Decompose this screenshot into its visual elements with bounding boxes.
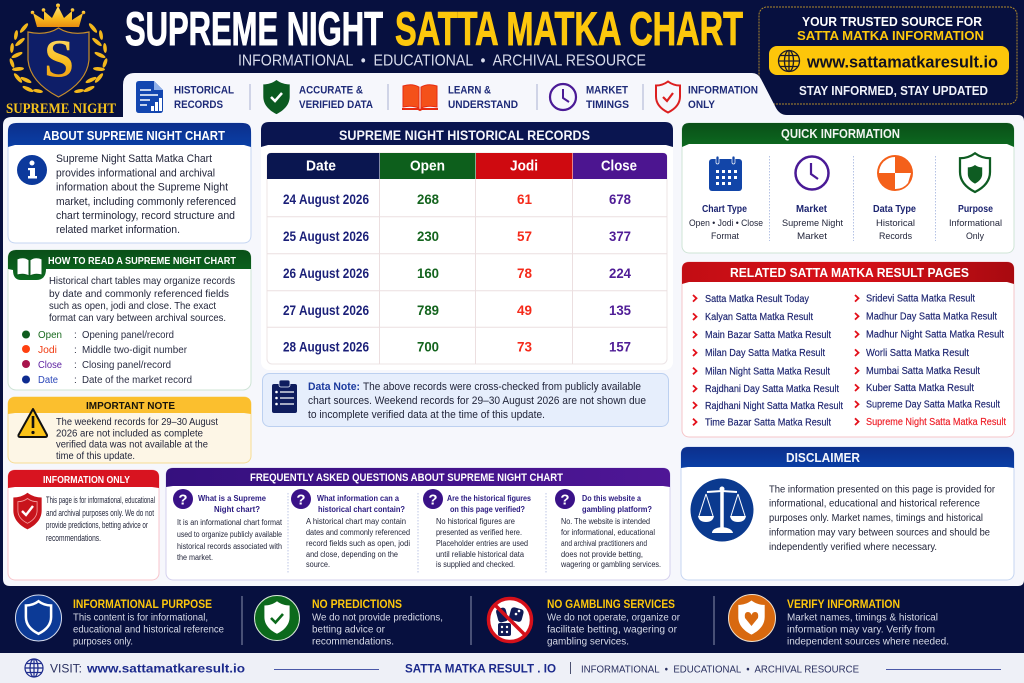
title: SUPREME NIGHT <box>125 3 383 56</box>
legend: jodi: Middle two-digit number <box>82 345 188 356</box>
row: 28 August 2026: 157 <box>609 338 631 354</box>
row: 27 August 2026: 27 August 2026 <box>283 302 369 318</box>
legend: close: Closing panel/record <box>82 360 171 371</box>
highlight: verify information: information may vary. Verify from <box>787 624 935 636</box>
row: 24 August 2026: 678 <box>609 191 631 207</box>
icon: information shield <box>656 82 680 112</box>
icon: footer globe <box>25 659 43 677</box>
links: right column: Mumbai Satta Matka Result <box>866 366 980 377</box>
disclaimer text: independently verified where necessary. <box>769 542 937 553</box>
disclaimer text <box>769 484 996 553</box>
FAQ item 2: source. <box>306 560 330 569</box>
legend: open: Open <box>38 330 62 341</box>
about text: provides informational and archival <box>56 168 215 180</box>
FAQ item 2: A historical chart may contain <box>306 517 406 526</box>
feature strip <box>136 80 758 114</box>
FAQ item 4 <box>555 489 661 569</box>
icon: scales <box>690 478 754 542</box>
table header: open <box>380 153 476 179</box>
table header: open: Open <box>410 158 445 174</box>
FAQ item 4: Do this website a <box>582 493 641 503</box>
about text: information about the Supreme Night <box>56 182 228 194</box>
icon: open book <box>402 85 438 110</box>
disclaimer text: information may vary between sources and should be <box>769 528 990 538</box>
highlight: informational purpose: INFORMATIONAL PURPOSE <box>73 599 212 611</box>
FAQ item 4: No. The website is intended <box>561 517 650 526</box>
FAQ item 1: the market. <box>177 553 213 562</box>
FAQ item 4: does not provide betting, <box>561 550 643 559</box>
accurate data label: ACCURATE & <box>299 84 363 96</box>
FAQ item 1: It is an informational chart format <box>177 518 283 527</box>
visit link: VISIT: <box>50 662 82 676</box>
information only label <box>688 84 758 111</box>
disclaimer text: The information presented on this page is provided for <box>769 484 996 496</box>
data note text: chart sources. Weekend records for 29–30 August 2026 are not shown due <box>308 395 646 407</box>
FAQ item 4: ? <box>560 492 570 508</box>
about heading: ABOUT SUPREME NIGHT CHART <box>43 129 225 143</box>
icon: clock <box>550 84 576 110</box>
row: 26 August 2026: 160 <box>417 265 439 281</box>
links: right column: Sridevi Satta Matka Result <box>866 294 975 304</box>
panel: information only <box>8 470 159 580</box>
legend: date: Date <box>38 375 58 386</box>
row: 25 August 2026: 230 <box>417 228 439 244</box>
FAQ item 3: presented as verified here. <box>436 528 522 537</box>
row: 26 August 2026: 26 August 2026 <box>283 265 369 281</box>
FAQ heading: FREQUENTLY ASKED QUESTIONS ABOUT SUPREME NIGHT CHART <box>250 472 563 484</box>
footer bar <box>0 653 1024 683</box>
panel: disclaimer <box>681 447 1014 580</box>
quick item: market: Market <box>797 231 827 242</box>
about text: chart terminology, record structure and <box>56 210 235 222</box>
FAQ item 3: Are the historical figures <box>447 493 531 503</box>
legend: close <box>22 360 171 371</box>
highlight: verify information: independent sources where needed. <box>787 636 949 648</box>
panel: quick information <box>682 123 1014 253</box>
historical records label: RECORDS <box>174 99 223 111</box>
quick item: market: Market <box>796 204 828 215</box>
data note text: The above records were cross-checked from publicly available <box>363 381 641 393</box>
icon: crown <box>31 4 85 27</box>
quick item: data type <box>873 155 916 242</box>
information only text: and archival purposes only. We do not <box>46 508 154 519</box>
quick item: market <box>782 156 843 242</box>
legend: jodi: : <box>74 345 77 356</box>
row: 27 August 2026: 789 <box>417 302 439 318</box>
links: left column: Milan Day Satta Matka Result <box>705 348 825 359</box>
highlight: no gambling services: gambling services. <box>547 636 629 648</box>
accurate data label: VERIFIED DATA <box>299 99 373 111</box>
callout: data note <box>262 374 668 426</box>
important note heading: IMPORTANT NOTE <box>86 400 175 412</box>
row: 24 August 2026 <box>283 191 631 207</box>
FAQ item 2: What information can a <box>317 493 399 503</box>
about heading <box>8 123 251 147</box>
highlight: verify information <box>728 594 949 648</box>
data note text: Data Note: <box>308 381 360 393</box>
market timings label: MARKET <box>586 84 628 96</box>
row: 25 August 2026: 377 <box>609 228 631 244</box>
logo: Supreme Night shield <box>6 4 116 117</box>
legend: jodi: Jodi <box>38 345 57 356</box>
FAQ item 3: is supplied and checked. <box>436 560 515 569</box>
website address: www.sattamatkaresult.io <box>806 52 998 72</box>
FAQ item 2: dates and commonly referenced <box>306 528 410 537</box>
links: left column: Satta Matka Result Today <box>705 294 809 305</box>
FAQ item 1: What is a Supreme <box>198 493 266 503</box>
information only text: recommendations. <box>46 533 101 544</box>
title: SATTA MATKA CHART <box>395 3 743 56</box>
table header: jodi <box>476 153 572 179</box>
quick item: data type: Historical <box>876 218 915 229</box>
how to read text: Historical chart tables may organize records <box>49 275 235 287</box>
FAQ item 2: historical chart contain? <box>318 504 405 514</box>
FAQ item 3: until reliable historical data <box>436 550 525 559</box>
legend: date: : <box>74 375 77 386</box>
historical records label <box>174 84 234 111</box>
market timings label: TIMINGS <box>586 99 629 111</box>
links: right column: Madhur Night Satta Matka Result <box>866 330 1004 340</box>
highlight: no predictions: We do not provide predictions, <box>312 612 443 624</box>
panel: important note <box>8 397 251 463</box>
about text: market, including commonly referenced <box>56 196 236 208</box>
row: 26 August 2026: 224 <box>609 265 631 281</box>
row: 28 August 2026: 73 <box>517 338 532 354</box>
legend: open: : <box>74 330 77 341</box>
icon: left laurel <box>9 22 43 94</box>
FAQ item 2 <box>291 489 410 569</box>
disclaimer heading: DISCLAIMER <box>786 451 860 465</box>
legend: close: Close <box>38 360 62 371</box>
learn label: UNDERSTAND <box>448 99 518 111</box>
panel: FAQ <box>166 468 670 580</box>
records table <box>267 153 667 364</box>
highlight: no predictions: recommendations. <box>312 636 394 648</box>
highlight: informational purpose: purposes only. <box>73 636 133 648</box>
related pages heading <box>682 262 1014 284</box>
main white content area <box>3 73 1024 586</box>
links: right column: Kuber Satta Matka Result <box>866 383 974 394</box>
trusted source highlight: SATTA MATKA INFORMATION <box>797 28 984 43</box>
FAQ item 3: on this page verified? <box>450 504 525 514</box>
footer tagline: INFORMATIONAL • EDUCATIONAL • ARCHIVAL RESOURCE <box>581 664 859 676</box>
quick item: purpose: Only <box>966 231 984 242</box>
FAQ item 2: and close, depending on the <box>306 550 399 559</box>
links: right column: Madhur Day Satta Matka Result <box>866 312 997 322</box>
market timings label <box>586 84 629 111</box>
logo letter S: S <box>44 28 74 88</box>
panel: how to read <box>8 250 251 390</box>
links: right column: Supreme Night Satta Matka Result <box>866 417 1006 428</box>
quick item: chart type: Open • Jodi • Close <box>689 218 763 229</box>
legend: close: : <box>74 360 77 371</box>
information only text: provide predictions, betting advice or <box>46 520 148 531</box>
disclaimer heading <box>681 447 1014 468</box>
quick item: purpose: Purpose <box>958 204 993 215</box>
how to read text: such as open, jodi and close. The exact <box>49 300 216 312</box>
panel: trusted source box <box>759 7 1017 104</box>
icon: info <box>17 155 47 185</box>
FAQ item 4: wagering or gambling services. <box>560 560 661 569</box>
quick information heading: QUICK INFORMATION <box>781 127 900 141</box>
row: 26 August 2026: 78 <box>517 265 532 281</box>
table header: date <box>267 153 380 179</box>
highlight: informational purpose: This content is for informational, <box>73 612 208 624</box>
FAQ item 1 <box>173 489 283 562</box>
highlight: informational purpose: educational and historical reference <box>73 624 224 636</box>
links: left column <box>705 294 843 428</box>
row: 27 August 2026: 135 <box>609 302 631 318</box>
FAQ item 2: ? <box>296 492 306 508</box>
quick item: purpose: Informational <box>949 218 1002 229</box>
disclaimer text: informational, educational and historical reference <box>769 498 980 510</box>
disclaimer text: purposes only. Market names, timings and historical <box>769 513 983 524</box>
links: right column: Supreme Day Satta Matka Result <box>866 400 1000 410</box>
table header: close <box>573 153 667 179</box>
panel: related pages <box>682 262 1014 437</box>
icon: right laurel <box>74 22 108 94</box>
panel: about <box>8 123 251 243</box>
how to read text: format can vary between archival sources. <box>49 312 226 324</box>
quick item: chart type <box>689 156 763 242</box>
learn label <box>448 84 518 111</box>
quick item: market: Supreme Night <box>782 218 843 229</box>
legend: date <box>22 375 192 386</box>
row: 25 August 2026: 57 <box>517 228 532 244</box>
historical records label: HISTORICAL <box>174 84 234 96</box>
quick item: chart type: Format <box>711 231 739 242</box>
icon: clipboard <box>272 380 297 413</box>
tagline: STAY INFORMED, STAY UPDATED <box>799 84 988 98</box>
records heading: SUPREME NIGHT HISTORICAL RECORDS <box>339 128 590 143</box>
related pages heading: RELATED SATTA MATKA RESULT PAGES <box>730 266 969 280</box>
subtitle: INFORMATIONAL • EDUCATIONAL • ARCHIVAL RESOURCE <box>238 52 646 70</box>
highlight: no gambling services <box>488 598 681 648</box>
highlight: no predictions: NO PREDICTIONS <box>312 599 402 611</box>
important note heading <box>8 397 251 414</box>
logo wordmark: SUPREME NIGHT <box>6 101 116 117</box>
links: left column: Milan Night Satta Matka Result <box>705 366 830 378</box>
footer brand: SATTA MATKA RESULT . IO <box>405 664 556 676</box>
how to read text: by date and commonly referenced fields <box>49 288 229 300</box>
row: 28 August 2026 <box>283 338 631 354</box>
highlight: no predictions: betting advice or <box>312 624 386 636</box>
highlight: no gambling services: facilitate betting, wagering or <box>547 624 678 636</box>
icon: historical records document <box>136 81 163 113</box>
table header: close: Close <box>601 158 637 174</box>
important note text: 2026 are not included as complete <box>56 428 203 440</box>
learn label: LEARN & <box>448 84 491 96</box>
quick item: chart type: Chart Type <box>702 204 747 215</box>
how to read text <box>49 275 235 324</box>
icon: book <box>17 258 42 276</box>
data note text <box>308 381 646 421</box>
icon: red shield <box>13 493 42 529</box>
highlight: no gambling services: NO GAMBLING SERVICES <box>547 599 675 611</box>
important note text: The weekend records for 29–30 August <box>56 417 218 428</box>
links: left column: Kalyan Satta Matka Result <box>705 312 813 323</box>
legend: open <box>22 330 174 341</box>
how to read heading: HOW TO READ A SUPREME NIGHT CHART <box>48 255 237 267</box>
website pill <box>769 46 1009 75</box>
how to read heading <box>8 250 251 280</box>
table header: jodi: Jodi <box>510 158 538 174</box>
important note text <box>56 417 218 462</box>
links: left column: Time Bazar Satta Matka Result <box>705 418 831 428</box>
quick item: data type: Data Type <box>873 204 916 215</box>
highlight: no predictions <box>254 596 443 648</box>
data note text: to incomplete verified data at the time of this update. <box>308 409 545 421</box>
band: policy highlights <box>0 587 1024 653</box>
about text <box>56 153 236 236</box>
links: left column: Rajdhani Day Satta Matka Result <box>705 384 839 395</box>
row: 28 August 2026: 28 August 2026 <box>283 338 369 354</box>
icon: shield <box>28 28 89 97</box>
FAQ item 3: Placeholder entries are used <box>436 539 528 548</box>
row: 27 August 2026 <box>283 302 631 318</box>
FAQ item 4: and archival practitioners and <box>561 539 647 548</box>
quick item: purpose <box>949 153 1002 242</box>
information only label: ONLY <box>688 99 716 111</box>
legend: open: Opening panel/record <box>82 330 174 341</box>
information only label: INFORMATION <box>688 84 758 96</box>
FAQ item 1: used to organize publicly available <box>177 530 282 539</box>
title <box>125 3 743 56</box>
FAQ item 3 <box>423 489 531 569</box>
FAQ item 2: record fields such as open, jodi <box>306 539 410 548</box>
about text: Supreme Night Satta Matka Chart <box>56 153 212 165</box>
FAQ item 1: ? <box>178 492 188 508</box>
links: left column: Main Bazar Satta Matka Result <box>705 330 831 341</box>
FAQ heading <box>166 468 670 487</box>
row: 25 August 2026: 25 August 2026 <box>283 228 369 244</box>
accurate data label <box>299 84 373 111</box>
quick item: data type: Records <box>879 231 912 242</box>
icon: globe <box>778 50 800 72</box>
row: 24 August 2026: 61 <box>517 191 532 207</box>
information only heading: INFORMATION ONLY <box>43 474 130 486</box>
links: right column: Worli Satta Matka Result <box>866 348 969 359</box>
highlight: informational purpose <box>16 595 224 648</box>
links: left column: Rajdhani Night Satta Matka Result <box>705 401 843 412</box>
visit link: www.sattamatkaresult.io <box>86 662 245 676</box>
about text: related market information. <box>56 224 180 236</box>
information only text <box>46 495 155 544</box>
panel: historical records <box>261 122 673 370</box>
important note text: verified data was not available at the <box>56 440 208 450</box>
information only heading <box>8 470 159 488</box>
row: 24 August 2026: 268 <box>417 191 439 207</box>
legend: jodi <box>22 345 188 356</box>
highlight: no gambling services: We do not operate, organize or <box>547 612 681 624</box>
row: 27 August 2026: 49 <box>517 302 532 318</box>
trusted source text: YOUR TRUSTED SOURCE FOR <box>802 14 983 29</box>
row: 24 August 2026: 24 August 2026 <box>283 191 369 207</box>
quick information heading <box>682 123 1014 147</box>
legend: date: Date of the market record <box>82 375 192 386</box>
FAQ item 1: Night chart? <box>214 504 260 514</box>
important note text: time of this update. <box>56 451 135 462</box>
links: right column <box>866 294 1006 428</box>
FAQ item 4: gambling platform? <box>582 504 652 514</box>
row: 26 August 2026 <box>283 265 631 281</box>
icon: verified shield <box>263 80 290 114</box>
FAQ item 3: ? <box>428 492 438 508</box>
highlight: verify information: Market names, timings & historical <box>787 612 938 624</box>
icon: warning triangle <box>18 409 47 437</box>
FAQ item 1: historical records associated with <box>177 542 282 551</box>
arrows <box>693 295 858 425</box>
row: 25 August 2026 <box>283 228 631 244</box>
row: 28 August 2026: 700 <box>417 338 439 354</box>
FAQ item 3: No historical figures are <box>436 517 516 526</box>
information only text: This page is for informational, educational <box>46 495 155 506</box>
FAQ item 4: for informational, educational <box>561 528 655 537</box>
table header: date: Date <box>306 158 336 174</box>
records heading <box>261 122 673 147</box>
highlight: verify information: VERIFY INFORMATION <box>787 599 900 611</box>
